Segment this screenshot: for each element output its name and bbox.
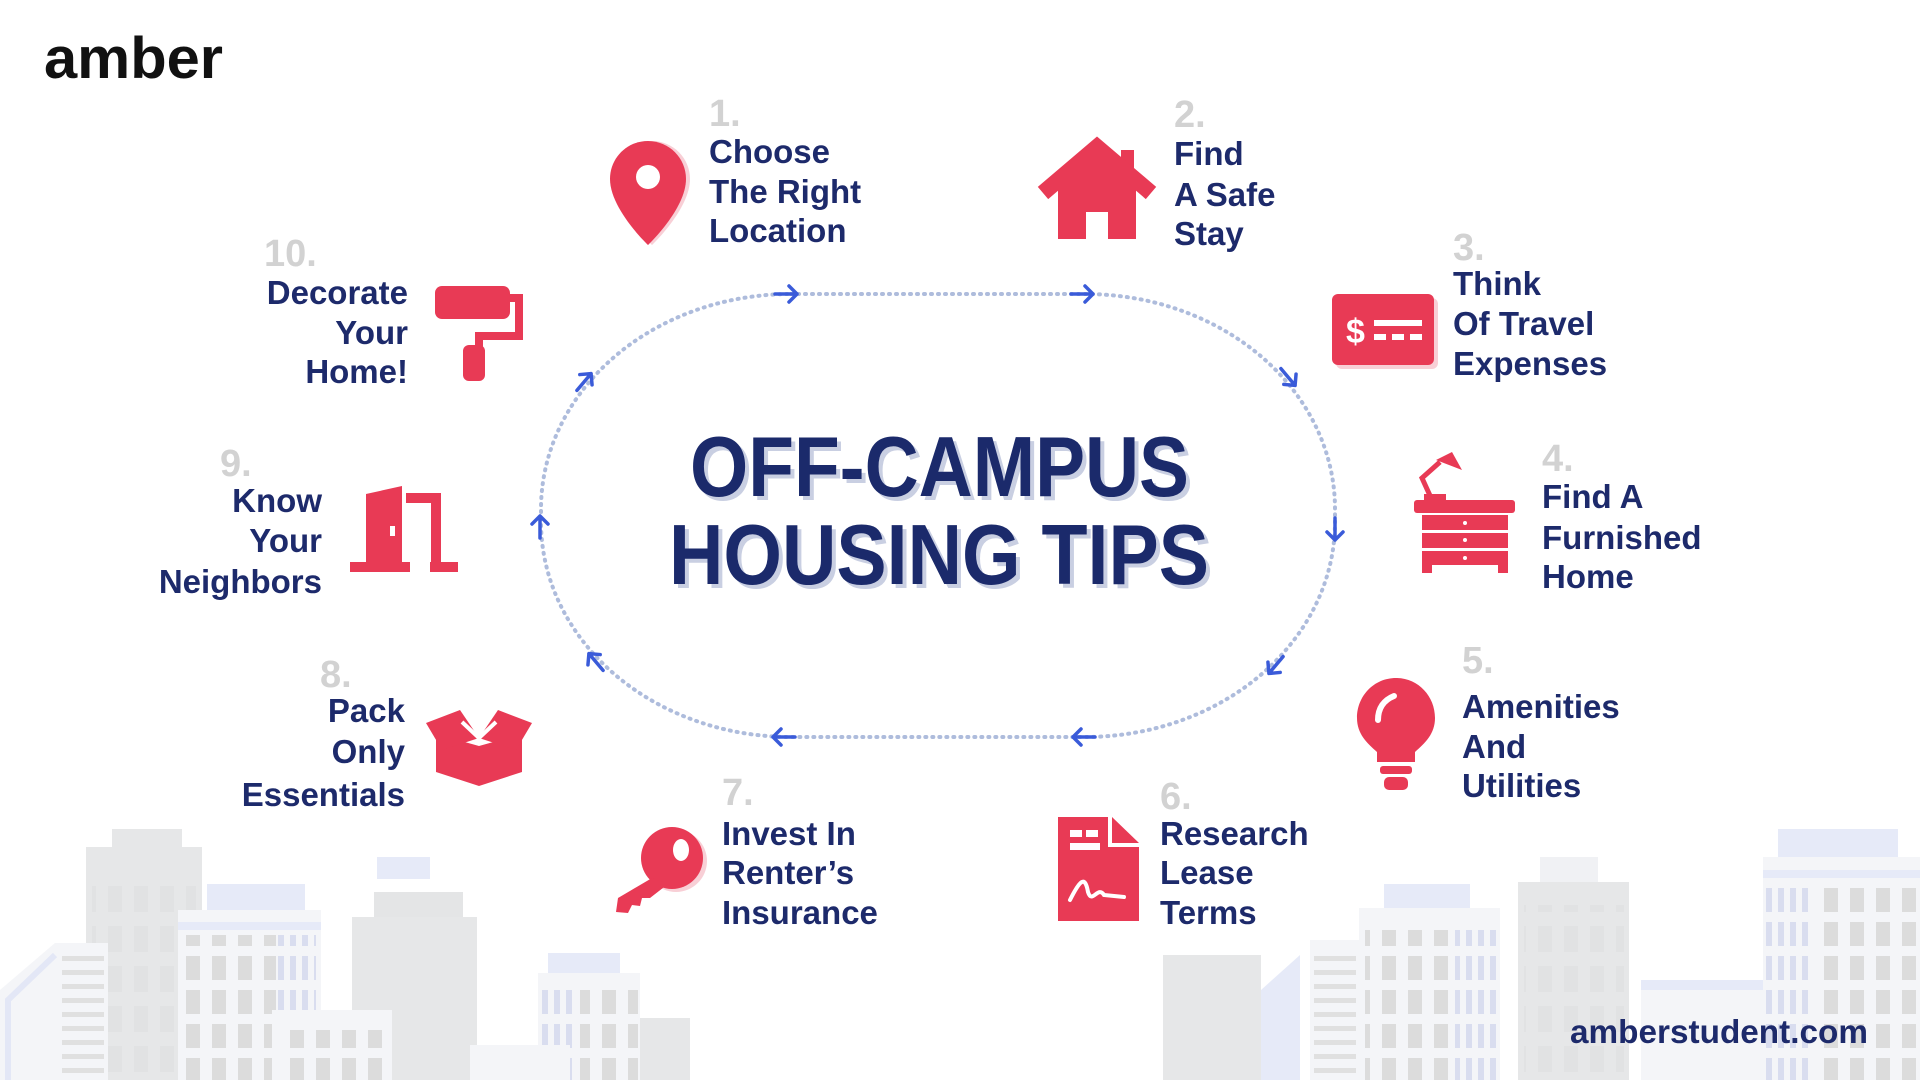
icon: card: $ (1346, 313, 1365, 351)
dotted loop (541, 294, 1335, 737)
icon: paint roller (435, 286, 519, 381)
item 7: insurance: 7. (722, 772, 754, 814)
item 3: travel expenses: 3. (1453, 227, 1485, 269)
icon: document (1058, 817, 1139, 921)
item 9: neighbors (159, 443, 458, 600)
item 6: lease terms: Terms (1160, 894, 1257, 931)
icon: box (426, 710, 532, 786)
item 6: lease terms: Research (1160, 815, 1309, 852)
footer url: amberstudent.com (1570, 1013, 1868, 1050)
item 2: safe stay: 2. (1174, 94, 1206, 136)
item 4: furnished home: 4. (1542, 438, 1574, 480)
item 6: lease terms (1058, 776, 1309, 931)
item 7: insurance: Renter’s (722, 854, 854, 891)
skyline: right (1163, 829, 1920, 1080)
item 4: furnished home: Furnished (1542, 519, 1702, 556)
icon: card (1332, 294, 1438, 369)
item 1: choose location: The Right (709, 173, 861, 210)
item 4: furnished home: Home (1542, 558, 1634, 595)
item 9: neighbors: Neighbors (159, 563, 322, 600)
icon: key (616, 827, 707, 913)
item 2: safe stay: Find (1174, 135, 1244, 172)
icon: door (350, 486, 458, 572)
item 3: travel expenses (1332, 227, 1607, 382)
item 5: amenities: And (1462, 728, 1526, 765)
item 1: choose location: Choose (709, 133, 830, 170)
item 8: pack essentials: 8. (320, 654, 352, 696)
title: HOUSING TIPS (673, 512, 1213, 607)
item 5: amenities (1357, 640, 1620, 804)
item 2: safe stay: A Safe (1174, 176, 1275, 213)
title (669, 420, 1213, 607)
item 4: furnished home: Find A (1542, 478, 1643, 515)
item 1: choose location: 1. (709, 93, 741, 135)
icon: bulb (1357, 678, 1435, 790)
item 7: insurance: Insurance (722, 894, 878, 931)
item 10: decorate: Decorate (267, 274, 408, 311)
item 7: insurance (616, 772, 878, 931)
item 7: insurance: Invest In (722, 815, 856, 852)
item 5: amenities: Utilities (1462, 767, 1581, 804)
arrows on loop (532, 286, 1343, 745)
item 9: neighbors: Know (232, 482, 322, 519)
item 4: furnished home (1414, 438, 1702, 595)
item 3: travel expenses: Think (1453, 265, 1542, 302)
item 6: lease terms: Lease (1160, 854, 1254, 891)
icon: pin (610, 141, 690, 245)
item 8: pack essentials: Essentials (242, 776, 405, 813)
item 9: neighbors: 9. (220, 443, 252, 485)
item 8: pack essentials: Only (332, 733, 406, 770)
item 8: pack essentials (242, 654, 532, 813)
item 3: travel expenses: Expenses (1453, 345, 1607, 382)
item 2: safe stay: Stay (1174, 215, 1244, 252)
icon: house (1043, 147, 1151, 239)
title: OFF-CAMPUS (690, 420, 1189, 515)
item 6: lease terms: 6. (1160, 776, 1192, 818)
title: HOUSING TIPS (669, 508, 1209, 603)
item 5: amenities: Amenities (1462, 688, 1620, 725)
logo: amber: amber (44, 26, 223, 91)
skyline: left (0, 829, 690, 1080)
item 10: decorate: 10. (264, 233, 317, 275)
item 10: decorate (264, 233, 519, 390)
item 1: choose location (610, 93, 861, 249)
item 9: neighbors: Your (249, 522, 322, 559)
item 1: choose location: Location (709, 212, 846, 249)
item 5: amenities: 5. (1462, 640, 1494, 682)
title: OFF-CAMPUS (694, 424, 1193, 519)
item 10: decorate: Home! (305, 353, 408, 390)
item 3: travel expenses: Of Travel (1453, 305, 1594, 342)
item 8: pack essentials: Pack (328, 692, 406, 729)
item 10: decorate: Your (335, 314, 408, 351)
icon: dresser with lamp (1414, 452, 1515, 573)
item 2: safe stay (1043, 94, 1275, 252)
